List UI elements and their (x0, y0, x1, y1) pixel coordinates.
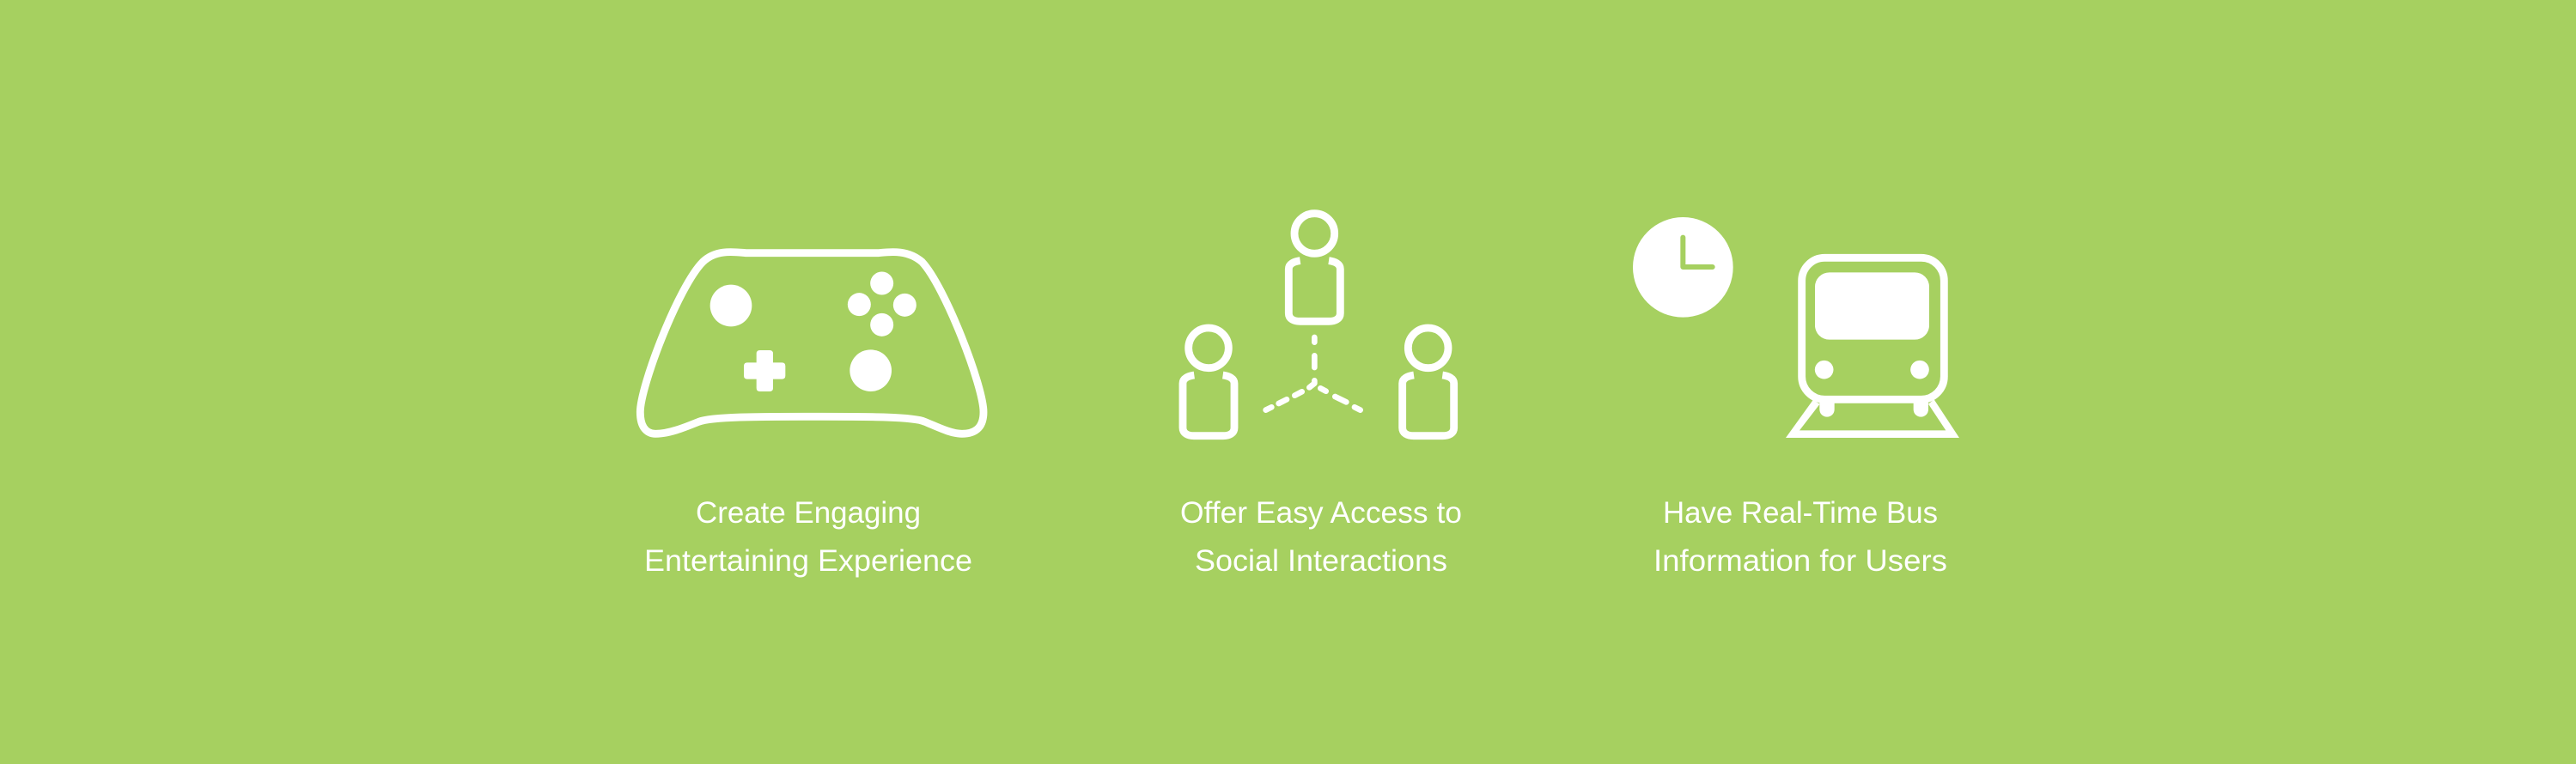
caption: engaging experience: Entertaining Experience (644, 544, 972, 578)
headlights (1815, 361, 1929, 379)
directional pad (744, 350, 785, 391)
caption: social interactions: Social Interactions (1195, 544, 1447, 578)
caption: engaging experience (644, 496, 972, 578)
icon: train (1786, 258, 1959, 438)
action buttons (848, 271, 917, 337)
panel: real-time bus information (1633, 217, 1959, 578)
left thumbstick (710, 285, 752, 326)
track (1786, 399, 1959, 438)
dashed connectors (1266, 337, 1361, 410)
icon: game controller (640, 252, 984, 434)
right thumbstick (850, 349, 892, 391)
person: left (1183, 328, 1234, 436)
caption: social interactions (1180, 496, 1462, 578)
caption: engaging experience: Create Engaging (696, 496, 921, 530)
person: top (1288, 214, 1340, 321)
person: right (1403, 328, 1454, 436)
wheels (1819, 401, 1928, 417)
train window (1815, 272, 1929, 340)
icon: connected people (1183, 214, 1454, 436)
controller outline (640, 252, 984, 434)
caption: social interactions: Offer Easy Access to (1180, 496, 1462, 530)
panel: social interactions (1180, 214, 1462, 578)
train body (1802, 258, 1944, 399)
caption: real-time bus information: Have Real-Time Bus (1663, 496, 1938, 530)
panel: engaging experience (640, 252, 984, 578)
caption: real-time bus information (1653, 496, 1947, 578)
caption: real-time bus information: Information for Users (1653, 544, 1947, 578)
icon: clock (1633, 217, 1733, 318)
